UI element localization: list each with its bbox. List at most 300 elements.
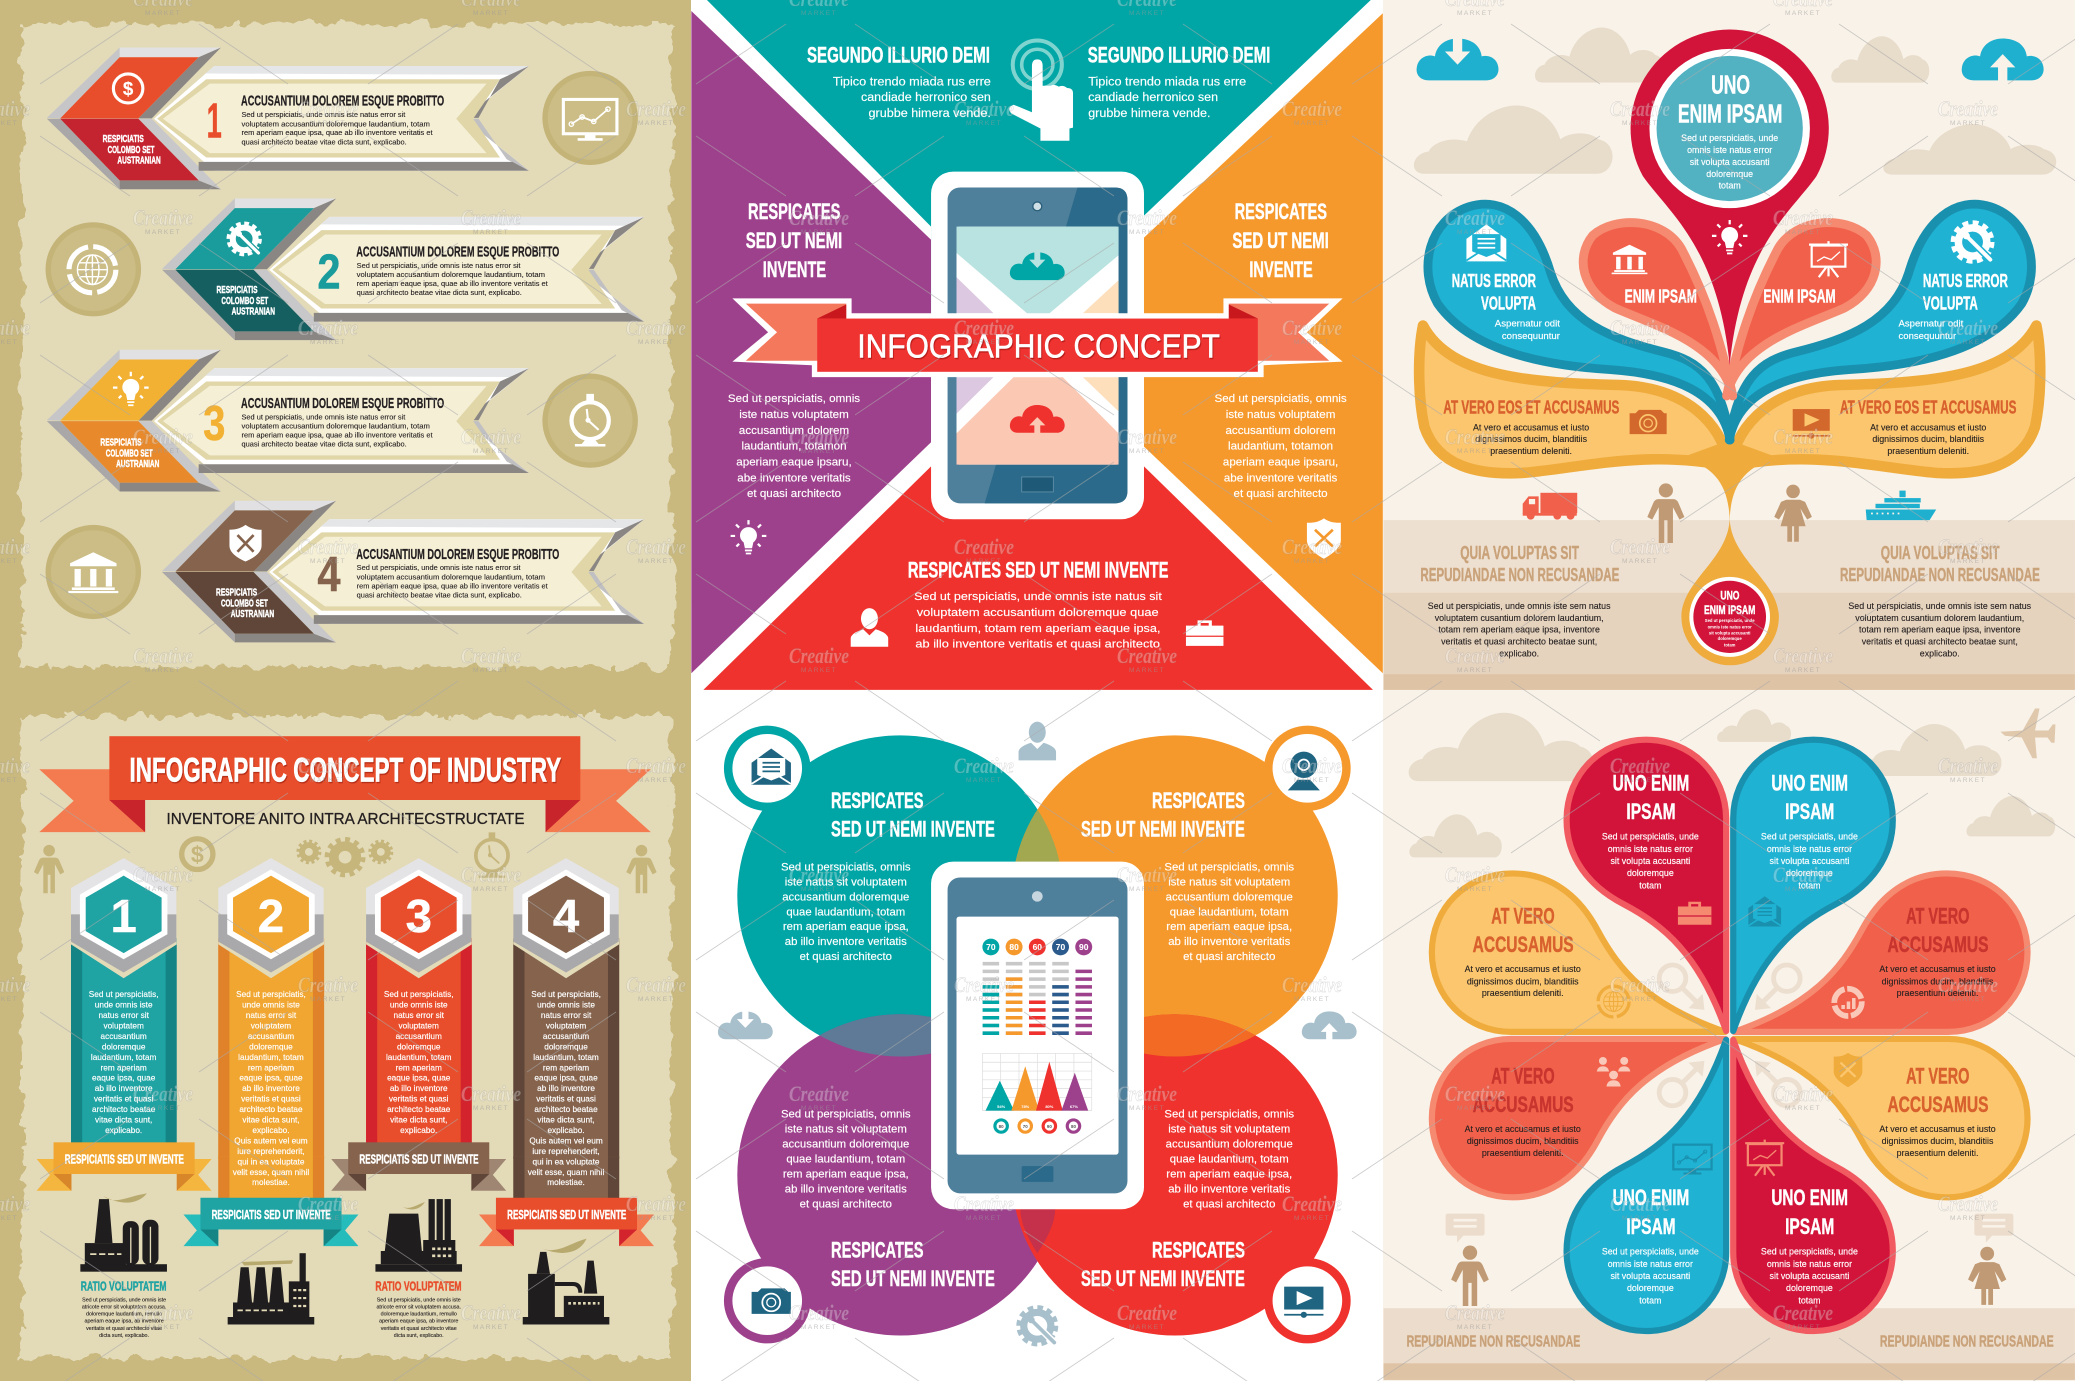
red body: accusantium doloremque (1166, 1139, 1293, 1151)
right ground body: veritatis et quasi architecto beatae sunt, (1862, 637, 2018, 647)
icon: blue cloud download (1417, 36, 1498, 80)
top-left red petal text: Sed ut perspiciatis, unde (1602, 832, 1699, 842)
bottom-left salmon petal text: praesentium deleniti. (1482, 1148, 1564, 1158)
icon: cloud download (718, 1009, 773, 1039)
factory 3 caption: doloremque laudantium, remullo (381, 1312, 457, 1318)
ribbon 3: RESPICIATIS SED UT INVENTE (359, 1152, 479, 1166)
column 4: ab illo inventore (537, 1084, 595, 1093)
right yellow leaf text: praesentium deleniti. (1887, 446, 1969, 456)
column 1: unde omnis iste (95, 1001, 153, 1010)
score circles: 60 (1033, 942, 1042, 952)
bar columns (991, 962, 1084, 1035)
icon: ship (1866, 491, 1936, 520)
red heading (1081, 1238, 1245, 1291)
left blue petal text: consequuntur (1502, 331, 1560, 341)
column 2 (218, 858, 324, 1200)
top-right blue petal text: sit volupta accusanti (1770, 856, 1849, 866)
corner icon: mail (724, 726, 811, 811)
column 4: Sed ut perspiciatis, (531, 990, 601, 999)
factory 3 caption: veritatis et quasi architecto vitae (381, 1326, 457, 1332)
column 2: molestiae. (252, 1178, 290, 1187)
teal heading: RESPICATES (831, 788, 923, 813)
column 2: vitae dicta sunt, (242, 1116, 300, 1125)
orange heading: INVENTE (1249, 257, 1313, 282)
left ground label: REPUDIANDE NON RECUSANDAE (1407, 1334, 1580, 1350)
arrow row 2: 2 (317, 244, 341, 300)
right salmon petal: ENIM IPSAM (1763, 286, 1836, 307)
top-left red petal text: sit volupta accusanti (1610, 856, 1690, 866)
arrow row 4: rem aperiam eaque ipsa, quae ab illo inventore veritatis et (357, 582, 548, 590)
teal body: quae laudantium, totam (786, 906, 905, 918)
small drop circle: sit volupta accusanti (1709, 630, 1750, 635)
orange heading: RESPICATES (1152, 788, 1245, 813)
top-left red petal text: UNO ENIM (1613, 770, 1689, 795)
purple body text: accusantium dolorem (739, 425, 849, 437)
small donuts: 80 (999, 1124, 1004, 1129)
red heading: RESPICATES (1152, 1238, 1245, 1263)
ribbon 4 (479, 1198, 654, 1246)
small drop circle: totam (1724, 642, 1736, 647)
right blue petal text: Aspernatur odit (1899, 319, 1964, 328)
column 4: veritatis et quasi (536, 1095, 596, 1104)
icon: woman (1774, 485, 1812, 542)
icon: person top (1019, 722, 1056, 760)
factory 1 caption: Sed ut perspiciatis, unde omnis iste (82, 1298, 166, 1304)
yellow leaves and root (1419, 326, 2040, 665)
red body: quae laudantium, totam (1170, 1154, 1289, 1166)
phone (931, 172, 1144, 519)
score circles: 90 (1079, 942, 1089, 952)
arrow row 2: ACCUSANTIUM DOLOREM ESQUE PROBITTO (356, 245, 559, 260)
column 3: eaque ipsa, quae (387, 1074, 451, 1083)
icon: briefcase (1186, 620, 1223, 646)
small drop circle: omnis iste natus error (1708, 624, 1752, 629)
column 3: vitae dicta sunt, (390, 1116, 447, 1125)
column 3: architecto beatae (387, 1105, 451, 1114)
red triangle (703, 466, 1373, 690)
bottom-left blue petal text: IPSAM (1626, 1214, 1676, 1239)
top-right blue petal text: Sed ut perspiciatis, unde (1761, 832, 1858, 842)
purple triangle (691, 11, 931, 673)
column 2: veritatis et quasi (241, 1095, 301, 1104)
blue petals (1428, 204, 2031, 440)
purple heading (831, 1238, 995, 1291)
column 4: doloremque (544, 1042, 588, 1051)
purple body: iste natus sit voluptatem (785, 1124, 907, 1136)
teal heading: SED UT NEMI INVENTE (831, 817, 995, 841)
bottom-right red petal text: omnis iste natus error (1767, 1259, 1852, 1269)
icon: gear (1019, 1308, 1056, 1344)
top-left red petal text (1602, 770, 1711, 925)
arrow row 4: COLOMBO SET (221, 598, 268, 609)
bottom-left blue petal text: doloremque (1627, 1283, 1674, 1293)
right blue petal text (1899, 223, 2008, 341)
factory 1 caption: doloremque laudantium, remullo (86, 1312, 162, 1318)
arrow row 3: 3 (203, 395, 225, 451)
right yellow leaf text: At vero et accusamus et iusto (1870, 422, 1986, 432)
ribbon 1: RESPICIATIS SED UT INVENTE (65, 1152, 184, 1166)
arrow row 3: voluptatem accusantium doloremque laudantium, totam (242, 423, 430, 431)
arrow row 4: quasi architecto beatae vitae dicta sunt, explicabo. (357, 592, 522, 600)
overlaps (718, 810, 1255, 1253)
top-right salmon petal text (1834, 904, 1996, 1016)
teal heading and copy: SEGUNDO ILLURIO DEMI (807, 43, 990, 67)
column 2: Quis autem vel eum (234, 1136, 308, 1145)
column 2: natus error sit (246, 1011, 297, 1020)
corner icon: video (1264, 1258, 1351, 1343)
score circles: 70 (1056, 942, 1066, 952)
column 3: explicabo. (400, 1126, 437, 1135)
bottom-left salmon petal text: AT VERO (1491, 1063, 1555, 1088)
red heading: SED UT NEMI INVENTE (1081, 1266, 1245, 1291)
pin circle with text: ENIM IPSAM (1678, 100, 1782, 128)
top-left yellow petal text: dignissimos ducim, blanditiis (1467, 976, 1579, 986)
column 1: vitae dicta sunt, (95, 1116, 152, 1125)
bottom-right red petal text: UNO ENIM (1771, 1185, 1848, 1210)
arrow row 2: COLOMBO SET (221, 296, 268, 307)
left blue petal text (1452, 224, 1561, 341)
top-right blue petal text: omnis iste natus error (1767, 844, 1852, 854)
arrow row 1: AUSTRANIAN (117, 156, 161, 167)
icon: bank circle (46, 525, 141, 619)
arrow row 4 (162, 501, 644, 642)
top-left yellow petal text: AT VERO (1491, 904, 1555, 929)
left yellow leaf text (1443, 397, 1667, 456)
column 3: ab illo inventore (390, 1084, 448, 1093)
left ground heading: REPUDIANDAE NON RECUSANDAE (1420, 564, 1619, 585)
ground (1384, 1308, 2075, 1380)
column 4: molestiae. (547, 1178, 585, 1187)
teal body: ab illo inventore veritatis (785, 936, 907, 948)
column 1: veritatis et quasi (94, 1095, 154, 1104)
panel: infographic concept, phone with triangles (691, 0, 1383, 691)
icon: bulb in pin (1712, 220, 1747, 254)
arrow row 2: quasi architecto beatae vitae dicta sunt, explicabo. (357, 289, 522, 297)
icon: shield (1307, 518, 1341, 559)
top-left red petal text: IPSAM (1626, 799, 1676, 824)
arrow row 4: ACCUSANTIUM DOLOREM ESQUE PROBITTO (356, 547, 559, 563)
column 4: qui in ea voluptate (533, 1157, 600, 1166)
left ground body: explicabo. (1499, 649, 1539, 658)
bottom-left blue petal text: sit volupta accusanti (1610, 1271, 1690, 1281)
left yellow leaf text: dignissimos ducim, blanditiis (1475, 434, 1588, 444)
right blue petal text: consequuntur (1899, 331, 1956, 341)
gender symbols (1659, 965, 1800, 1106)
right blue petal text: VOLUPTA (1923, 292, 1978, 313)
column 2: Sed ut perspiciatis, (236, 990, 306, 999)
pin circle with text: sit volupta accusanti (1690, 157, 1770, 167)
left blue petal text: VOLUPTA (1481, 292, 1536, 313)
column 2: architecto beatae (239, 1105, 303, 1114)
factory 3 caption: RATIO VOLUPTATEM (375, 1279, 462, 1294)
teal body: iste natus sit voluptatem (785, 876, 907, 888)
main banner (732, 298, 1343, 377)
arrow row 1: $ (123, 78, 134, 99)
orange body text: Sed ut perspiciatis, omnis (1215, 393, 1347, 405)
background clouds (1409, 709, 2055, 857)
arrow row 1: ACCUSANTIUM DOLOREM ESQUE PROBITTO (241, 94, 444, 110)
column 2: laudantium, totam (238, 1053, 304, 1062)
ribbon 1 (37, 1142, 212, 1191)
red body: iste natus sit voluptatem (1168, 1124, 1290, 1136)
column 4: velit esse, quam nihil (528, 1168, 604, 1177)
column 2: voluptatem (251, 1022, 291, 1030)
bottom-left salmon petal text: ACCUSAMUS (1473, 1092, 1574, 1117)
left salmon petal: ENIM IPSAM (1625, 286, 1697, 307)
top-right blue petal text: doloremque (1786, 868, 1833, 878)
orange body: ab illo inventore veritatis (1168, 936, 1291, 948)
left ground body: voluptatem cusantium dolorem laudantium, (1435, 613, 1604, 623)
column 2: qui in ea voluptate (237, 1157, 305, 1166)
right ground body: voluptatem cusantium dolorem laudantium, (1855, 613, 2024, 623)
teal heading and copy (807, 43, 1270, 120)
orange body text: iste natus voluptatem (1226, 409, 1335, 421)
factory 3 caption: aperiam eaque ipsa, ab inventore (379, 1319, 458, 1325)
factory 3 (375, 1199, 462, 1272)
purple body: rem aperiam eaque ipsa, (783, 1169, 909, 1180)
top-left red petal text: totam (1639, 880, 1661, 890)
red body: ab illo inventore veritatis (1168, 1184, 1291, 1195)
small drop circle: ENIM IPSAM (1704, 603, 1755, 617)
left ground heading: QUIA VOLUPTAS SIT (1460, 542, 1579, 563)
bottom-right red petal text: sit volupta accusanti (1770, 1271, 1849, 1281)
column 3 (366, 858, 472, 1159)
red body: et quasi architecto (1183, 1199, 1275, 1210)
red body text: laudantium, totam rem aperiam eaque ipsa, (915, 623, 1161, 635)
pin circle with text: totam (1719, 181, 1741, 191)
small donuts: 80 (1071, 1124, 1076, 1129)
title banner (39, 736, 651, 832)
column 4: voluptatem (546, 1022, 586, 1030)
icon: globe circle (46, 222, 141, 316)
teal body: rem aperiam eaque ipsa, (783, 921, 909, 933)
top-left yellow petal text (1465, 904, 1629, 1017)
red pin (1631, 29, 1829, 365)
pin circle with text (1649, 49, 1810, 208)
area chart: 54% (997, 1104, 1006, 1109)
teal body: accusantium doloremque (782, 891, 909, 903)
column 1: accusantium (101, 1032, 147, 1041)
top-right blue petal text (1748, 770, 1858, 927)
phone with dashboard (931, 862, 1144, 1209)
column 2: explicabo. (252, 1126, 290, 1135)
factory 2 (228, 1253, 314, 1324)
small drop circle: doloremque (1718, 636, 1742, 641)
right salmon petal (1763, 241, 1848, 307)
panel: four overlapping circles with phone (718, 722, 1357, 1346)
arrow row 3: Sed ut perspiciatis, unde omnis iste natus error sit (242, 413, 405, 421)
top-left yellow petal text: ACCUSAMUS (1473, 932, 1574, 957)
man with speech bubble (1446, 1214, 1489, 1306)
orange body: quae laudantium, totam (1170, 906, 1289, 918)
orange heading: SED UT NEMI (1232, 228, 1329, 253)
right ground heading (1840, 542, 2040, 585)
column 3: Sed ut perspiciatis, (384, 990, 454, 999)
column 2: ab illo inventore (242, 1084, 300, 1093)
left blue petal text: Aspernatur odit (1495, 319, 1561, 328)
column 2: doloremque (249, 1042, 293, 1051)
corner icon: webcam (1264, 726, 1351, 811)
arrow row 4: 4 (317, 546, 341, 602)
column 3: accusantium (396, 1032, 442, 1041)
column 4: laudantium, totam (533, 1053, 599, 1062)
red body text (914, 591, 1163, 651)
ribbon 4: RESPICIATIS SED UT INVENTE (507, 1207, 627, 1222)
title banner: INFOGRAPHIC CONCEPT OF INDUSTRY (129, 752, 561, 789)
icon: person (851, 608, 888, 647)
column 4: architecto beatae (534, 1105, 598, 1114)
bottom-left salmon petal text (1465, 1057, 1630, 1158)
factory 1 caption (81, 1279, 167, 1339)
column 2: rem aperiam (248, 1063, 294, 1072)
orange body: et quasi architecto (1183, 951, 1275, 963)
bottom-left salmon petal text: At vero et accusamus et iusto (1465, 1124, 1581, 1134)
ribbon 3 (331, 1142, 506, 1191)
orange body text: abe inventore veritatis (1224, 472, 1338, 484)
teal heading and copy: grubbe himera vende. (869, 107, 991, 120)
right ground body: explicabo. (1920, 649, 1960, 658)
ground bands (1384, 520, 2075, 690)
column 4 (513, 858, 619, 1200)
purple heading (746, 199, 842, 282)
panel: industry arrows, vintage background (0, 0, 691, 1381)
ribbon 2 (183, 1198, 358, 1246)
orange circle (1012, 735, 1338, 1057)
factory 1 caption: atricote error sit voluptatem accusa. (82, 1305, 166, 1311)
small drop circle: UNO (1720, 588, 1740, 602)
arrow row 1: Sed ut perspiciatis, unde omnis iste natus error sit (242, 111, 405, 119)
orange triangle (1144, 13, 1383, 673)
decorative icons row: $ (191, 842, 204, 867)
icon: cloud upload (1302, 1011, 1357, 1042)
bottom-left blue petal text: totam (1639, 1295, 1661, 1305)
column 3: voluptatem (399, 1022, 439, 1030)
bottom-right yellow petal text: dignissimos ducim, blanditiis (1882, 1136, 1994, 1146)
column 3: unde omnis iste (390, 1001, 448, 1010)
purple body text: Sed ut perspiciatis, omnis (728, 393, 860, 405)
top-left red petal text: doloremque (1627, 868, 1674, 878)
right ground body: Sed ut perspiciatis, unde omnis iste sem natus (1848, 601, 2032, 611)
small donuts (995, 1120, 1080, 1132)
arrow row 4: RESPICIATIS (216, 587, 257, 598)
orange body text: aperiam eaque ipsaru, (1223, 457, 1338, 468)
left ground heading (1420, 542, 1619, 585)
purple heading: RESPICATES (748, 199, 840, 224)
arrow row 2: Sed ut perspiciatis, unde omnis iste natus error sit (357, 262, 521, 270)
purple heading: INVENTE (763, 257, 826, 282)
red body: Sed ut perspiciatis, omnis (1164, 1109, 1294, 1121)
purple body: ab illo inventore veritatis (785, 1184, 907, 1195)
column 4: accusantium (543, 1032, 589, 1041)
column 3: rem aperiam (396, 1063, 442, 1072)
orange body: rem aperiam eaque ipsa, (1166, 921, 1292, 933)
red body text: ab illo inventore veritatis et quasi architecto (915, 639, 1160, 651)
red circle (1012, 1014, 1338, 1335)
purple circle (737, 1014, 1063, 1335)
column 1: laudantium, totam (91, 1053, 157, 1062)
pin circle with text: doloremque (1706, 169, 1753, 179)
main banner: INFOGRAPHIC CONCEPT (857, 328, 1220, 365)
icon: clock circle (542, 374, 638, 468)
factory 3 caption: Sed ut perspiciatis, unde omnis iste (377, 1298, 461, 1304)
arrow row 3: rem aperiam eaque ipsa, quae ab illo inventore veritatis et (242, 431, 433, 439)
arrow row 1: 1 (207, 93, 222, 149)
arrow row 1: rem aperiam eaque ipsa, quae ab illo inventore veritatis et (242, 129, 433, 137)
bottom-left salmon petal text: dignissimos ducim, blanditiis (1467, 1136, 1579, 1146)
column 2: unde omnis iste (242, 1001, 300, 1010)
decorative icons row (34, 832, 657, 893)
panel: eight petal flower (1383, 691, 2075, 1381)
right ground heading: QUIA VOLUPTAS SIT (1881, 542, 2000, 563)
teal body: et quasi architecto (800, 951, 892, 963)
left yellow leaf text: praesentium deleniti. (1490, 446, 1572, 456)
purple body text: aperiam eaque ipsaru, (736, 457, 852, 468)
subtitle: INVENTORE ANITO INTRA ARCHITECSTRUCTATE (167, 811, 525, 828)
column 4: iure reprehenderit, (532, 1147, 600, 1156)
orange heading (1232, 199, 1329, 282)
column 4: Quis autem vel eum (529, 1136, 603, 1145)
column 3: veritatis et quasi (389, 1095, 449, 1104)
orange body text: laudantium, totamon (1228, 441, 1333, 453)
right ground body: totam rem aperiam eaque ipsa, inventore (1859, 625, 2021, 635)
orange body: accusantium doloremque (1166, 891, 1293, 903)
pin circle with text: UNO (1711, 71, 1750, 99)
purple heading: SED UT NEMI (746, 228, 842, 253)
top-right salmon petal text: praesentium deleniti. (1897, 988, 1978, 998)
teal heading and copy: SEGUNDO ILLURIO DEMI (1088, 43, 1270, 67)
arrow row 1: quasi architecto beatae vitae dicta sunt, explicabo. (242, 138, 407, 146)
column 3: 3 (406, 889, 432, 942)
purple body text: abe inventore veritatis (737, 472, 851, 484)
purple body: et quasi architecto (800, 1199, 892, 1210)
top-right blue petal text: totam (1798, 880, 1821, 890)
pin circle with text: Sed ut perspiciatis, unde (1681, 133, 1778, 143)
arrow row 3: RESPICIATIS (100, 437, 142, 448)
bottom-right yellow petal text (1834, 1053, 1996, 1158)
petals (1432, 740, 2028, 1331)
red body text: voluptatem accusantium doloremque quae (917, 607, 1159, 619)
column 2: eaque ipsa, quae (239, 1074, 303, 1083)
teal heading and copy: Tipico trendo miada rus erre (1088, 75, 1246, 88)
top-right salmon petal text: ACCUSAMUS (1887, 932, 1989, 957)
column 2: 2 (258, 889, 284, 942)
panel: pin and leaves tree (1383, 0, 2075, 691)
purple body: accusantium doloremque (782, 1139, 909, 1151)
left salmon petal (1612, 245, 1697, 307)
arrow row 3: COLOMBO SET (106, 448, 153, 459)
factory 3 caption: atricote error sit voluptatem accusa. (376, 1305, 461, 1311)
arrow row 1: voluptatem accusantium doloremque laudantium, totam (242, 120, 430, 128)
red body: rem aperiam eaque ipsa, (1166, 1169, 1292, 1180)
teal triangle (707, 0, 1371, 348)
orange heading: RESPICATES (1235, 199, 1327, 224)
purple heading: SED UT NEMI INVENTE (831, 1266, 995, 1291)
top-right salmon petal text: dignissimos ducim, blanditiis (1882, 976, 1994, 986)
corner icon: camera (724, 1258, 811, 1343)
score circles: 80 (1009, 942, 1019, 952)
teal circle (737, 735, 1063, 1057)
bottom-right red petal text (1745, 1140, 1858, 1305)
arrow row 3: ACCUSANTIUM DOLOREM ESQUE PROBITTO (241, 396, 444, 412)
factory 4 (523, 1239, 609, 1324)
factory 3 caption: dicta sunt, explicabo. (394, 1333, 444, 1339)
top-right salmon petal text: AT VERO (1906, 904, 1969, 929)
bottom-right yellow petal text: ACCUSAMUS (1887, 1092, 1989, 1117)
orange body text: et quasi architecto (1234, 488, 1328, 500)
score circles (982, 939, 1092, 955)
red body text: Sed ut perspiciatis, unde omnis iste natus sit (914, 591, 1163, 603)
factory 1 caption: aperiam eaque ipsa, ab inventore (85, 1319, 164, 1325)
